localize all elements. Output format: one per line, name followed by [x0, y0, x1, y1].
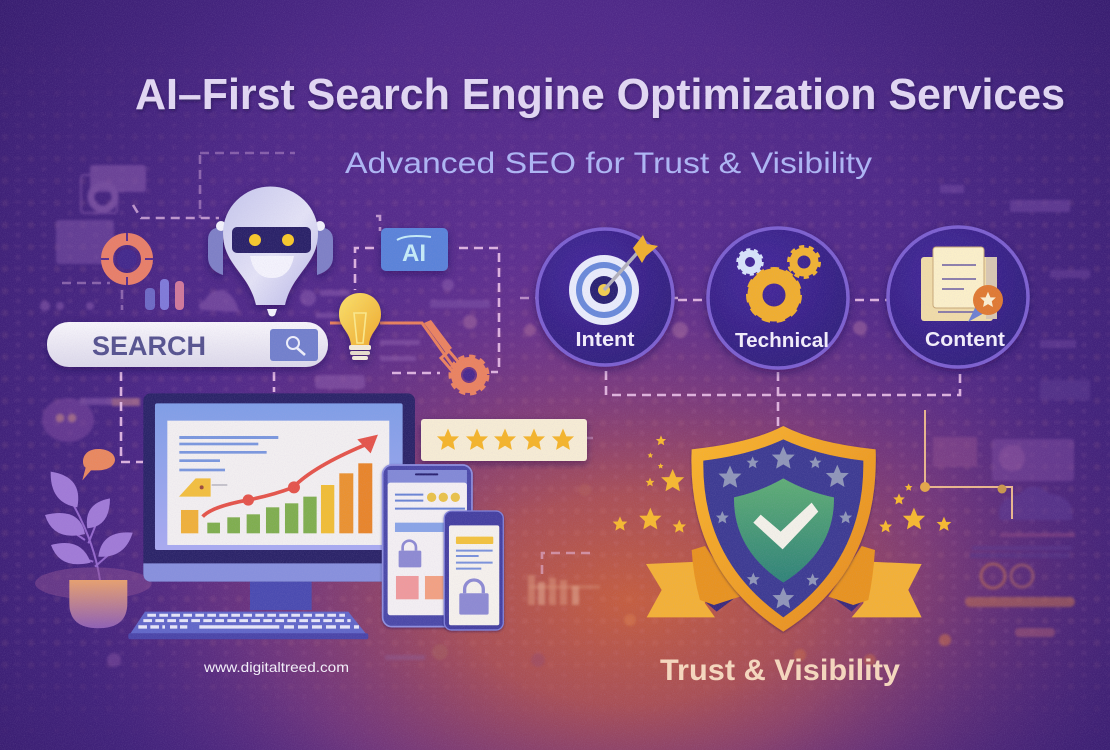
panel: intent: [537, 229, 673, 365]
speech bubble: [82, 449, 115, 480]
icon: gears: [738, 247, 819, 320]
panel: technical: [708, 228, 848, 368]
icon: light bulb: [339, 293, 381, 360]
website url: www.digitaltreed.com: [203, 659, 349, 675]
search label: SEARCH: [92, 331, 206, 361]
icon: wrench chain and gear: [330, 320, 487, 393]
label: content: Content: [925, 329, 1005, 351]
icon: AI badge: AI: [402, 240, 426, 267]
icon: tablet: [383, 465, 472, 627]
icon: plant with pot: [35, 449, 152, 628]
search bar: [47, 322, 328, 367]
ribbon: [646, 546, 922, 617]
icon: phone: [444, 511, 503, 630]
label: trust and visibility: Trust & Visibility: [660, 654, 900, 687]
subtitle: Advanced SEO for Trust & Visibility: [345, 147, 872, 180]
monitor stand: [250, 580, 312, 610]
five stars: [437, 428, 574, 450]
icon: mini bars: [145, 279, 184, 310]
search button: [270, 329, 318, 361]
tag icon: [179, 478, 211, 497]
gold stars right: [879, 483, 951, 532]
text lines: [179, 436, 278, 471]
icon: orange target gear: [101, 233, 153, 285]
bottom-left faint bars: [528, 575, 579, 605]
title: AI–First Search Engine Optimization Services: [135, 70, 1065, 119]
rating card: [421, 419, 587, 461]
icon: documents with star badge: [921, 247, 1003, 322]
network connector: [920, 410, 1012, 519]
icon: keyboard: [128, 612, 368, 639]
icon: monitor with growth chart: [143, 393, 415, 610]
trend arrow: [203, 435, 378, 517]
bar chart: [181, 463, 372, 533]
icon: robot: [208, 187, 333, 316]
icon: AI badge: [381, 228, 448, 271]
dashed connector lines: [62, 153, 960, 578]
label: technical: Technical: [735, 330, 829, 352]
icon: trust shield with ribbon: [646, 426, 922, 632]
shield: [691, 426, 876, 632]
faint background decoration: [40, 165, 1090, 667]
label: intent: Intent: [576, 329, 635, 351]
panel: content: [888, 227, 1028, 367]
monitor body: [143, 393, 415, 582]
gold stars left: [613, 435, 686, 533]
icon: target with arrow: [569, 235, 658, 325]
